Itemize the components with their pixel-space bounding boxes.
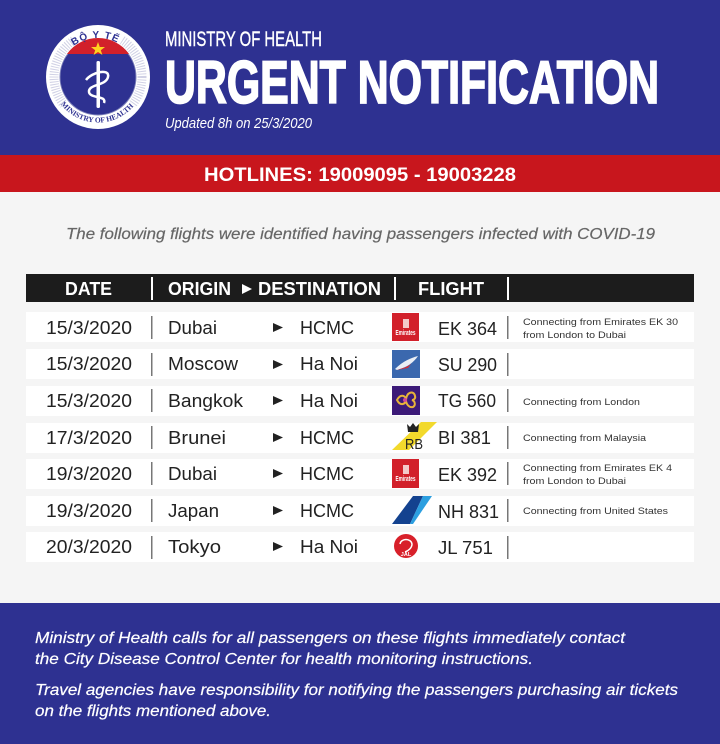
row: BI 381: Brunei: [168, 428, 226, 448]
row: NH 831: [26, 496, 694, 526]
row: TG 560: Bangkok: [168, 391, 244, 411]
row: EK 364: Connecting from Emirates EK 30: [523, 317, 678, 328]
row: NH 831: NH 831: [438, 502, 499, 522]
row: EK 364: HCMC: [300, 318, 354, 338]
table header: [26, 274, 694, 302]
footer paragraph 1: Ministry of Health calls for all passengers on these flights immediately contact: [35, 630, 626, 647]
footer paragraph 2: Travel agencies have responsibility for notifying the passengers purchasing air tickets: [35, 682, 678, 699]
row: JL 751: [26, 532, 694, 562]
header band: [0, 0, 720, 155]
table header: FLIGHT: [418, 279, 484, 299]
footer panel: [0, 603, 720, 744]
icon: Royal Brunei: RB: [405, 436, 423, 453]
row: JL 751: Tokyo: [168, 537, 221, 557]
row: EK 392: from London to Dubai: [523, 476, 626, 487]
row: SU 290: Ha Noi: [300, 354, 358, 374]
icon: Aeroflot: [392, 350, 420, 378]
icon: Emirates: [392, 459, 419, 488]
row: EK 392: Connecting from Emirates EK 4: [523, 463, 672, 474]
icon: Royal Brunei: [392, 422, 437, 453]
table header: ORIGIN: [168, 279, 231, 299]
row: EK 364: [26, 312, 694, 342]
row: JL 751: 20/3/2020: [46, 537, 132, 557]
row: EK 364: 15/3/2020: [46, 318, 132, 338]
row: BI 381: BI 381: [438, 428, 491, 448]
row: EK 364: EK 364: [438, 319, 497, 339]
row: EK 392: EK 392: [438, 465, 497, 485]
row: SU 290: [26, 349, 694, 379]
icon: Thai Airways: [392, 386, 420, 415]
row: SU 290: SU 290: [438, 355, 497, 375]
row: EK 364: Dubai: [168, 318, 217, 338]
row: TG 560: TG 560: [438, 391, 496, 411]
row: EK 392: [26, 459, 694, 489]
row: TG 560: [26, 386, 694, 416]
footer paragraph 2: on the flights mentioned above.: [35, 703, 271, 720]
icon: ministry logo: MINISTRY OF HEALTH: [60, 101, 134, 123]
table header: DATE: [65, 279, 112, 299]
row: BI 381: Connecting from Malaysia: [523, 433, 647, 444]
row: NH 831: Japan: [168, 501, 219, 521]
icon: Emirates: [392, 313, 419, 341]
icon: JAL: [394, 534, 418, 558]
intro sentence: The following flights were identified having passengers infected with COVID-19: [66, 226, 655, 243]
row: EK 364: from London to Dubai: [523, 330, 626, 341]
footer paragraph 1: [35, 630, 626, 668]
row: NH 831: HCMC: [300, 501, 354, 521]
row: NH 831: Connecting from United States: [523, 506, 668, 517]
row: TG 560: 15/3/2020: [46, 391, 132, 411]
row: BI 381: [26, 422, 694, 453]
icon: ANA: [392, 496, 432, 524]
icon: JAL: JAL: [401, 552, 412, 558]
row: JL 751: Ha Noi: [300, 537, 358, 557]
row: BI 381: 17/3/2020: [46, 428, 132, 448]
icon: Emirates: Emirates: [396, 330, 416, 337]
update date: Updated 8h on 25/3/2020: [165, 115, 313, 132]
icon: ministry logo: [46, 25, 150, 129]
row: NH 831: 19/3/2020: [46, 501, 132, 521]
table header: DESTINATION: [258, 279, 381, 299]
row: EK 392: HCMC: [300, 464, 354, 484]
ministry heading: MINISTRY OF HEALTH: [165, 28, 322, 51]
row: SU 290: 15/3/2020: [46, 354, 132, 374]
row: TG 560: Connecting from London: [523, 397, 640, 408]
row: SU 290: Moscow: [168, 354, 239, 374]
footer paragraph 1: the City Disease Control Center for health monitoring instructions.: [35, 651, 533, 668]
hotline banner: HOTLINES: 19009095 - 19003228: [204, 165, 516, 186]
row: BI 381: HCMC: [300, 428, 354, 448]
row: EK 392: Dubai: [168, 464, 217, 484]
row: EK 392: 19/3/2020: [46, 464, 132, 484]
row: JL 751: JL 751: [438, 538, 493, 558]
footer paragraph 2: [35, 682, 678, 720]
hotline banner: [0, 155, 720, 192]
icon: ministry logo: BỘ Y TẾ: [70, 31, 120, 46]
row: TG 560: Ha Noi: [300, 391, 358, 411]
icon: Emirates: Emirates: [396, 476, 416, 483]
